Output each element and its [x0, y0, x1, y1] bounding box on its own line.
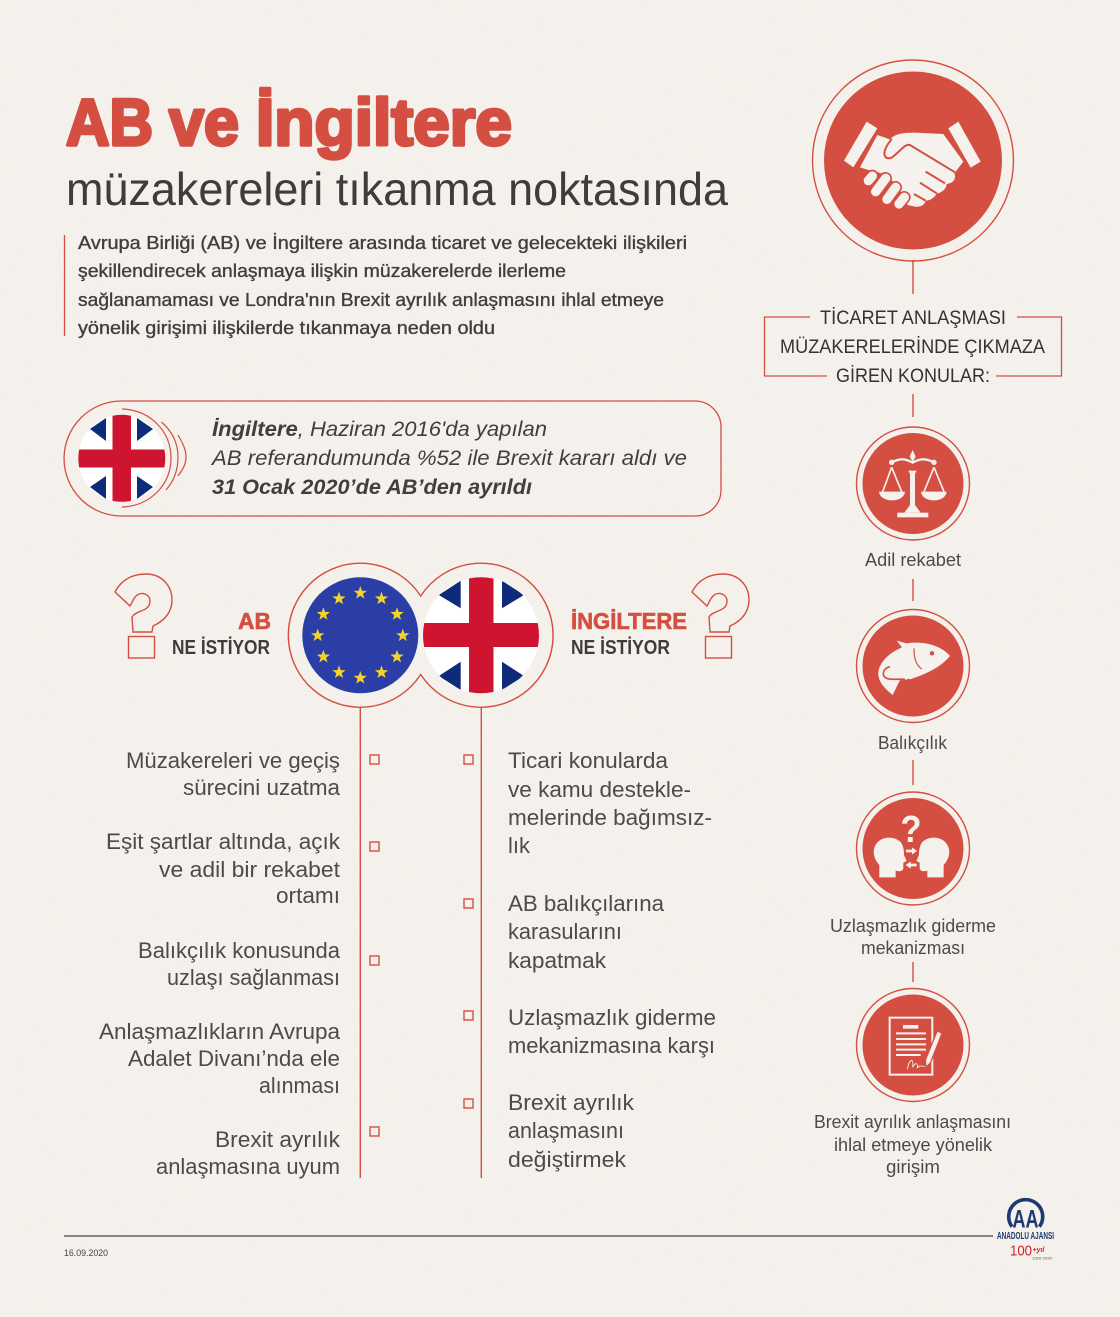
list: AB demands: Anlaşmazlıkların Avrupa: [99, 1019, 341, 1044]
heading: AB ne istiyor: NE İSTİYOR: [172, 636, 270, 659]
panel: topics heading: MÜZAKERELERİNDE ÇIKMAZA: [780, 335, 1045, 358]
list: İngiltere demands: karasularını: [508, 919, 622, 944]
label: Uzlaşmazlık giderme mekanizması: [830, 916, 996, 958]
list: AB demands: Eşit şartlar altında, açık: [106, 829, 341, 854]
connector: [912, 962, 914, 982]
list: AB demands: [99, 748, 379, 1179]
list: İngiltere demands: melerinde bağımsız-: [508, 805, 712, 830]
icon: UK flag large: [420, 575, 542, 697]
list: İngiltere demands: [464, 748, 716, 1172]
title: İngiltere: [256, 85, 512, 159]
callout text: [210, 418, 687, 499]
connector: [912, 760, 914, 785]
intro paragraph: Avrupa Birliği (AB) ve İngiltere arasında ticaret ve gelecekteki ilişkileri: [78, 233, 687, 253]
title: ve: [169, 85, 239, 159]
intro paragraph: sağlanamaması ve Londra'nın Brexit ayrılık anlaşmasını ihlal etmeye: [78, 290, 664, 310]
icon: dispute heads: ?: [900, 809, 922, 851]
connector: [912, 394, 914, 417]
logo: Anadolu Ajansı: ANADOLU AJANSI: [997, 1231, 1054, 1242]
list: AB demands: uzlaşı sağlanması: [167, 965, 340, 990]
label: Brexit ayrılık anlaşmasını ihlal etmeye yönelik girişim: girişim: [886, 1157, 940, 1177]
logo: Anadolu Ajansı: 1920-2020: [1032, 1256, 1053, 1260]
heading: İngiltere ne istiyor: NE İSTİYOR: [571, 636, 670, 659]
callout text: AB referandumunda %52 ile Brexit kararı aldı ve: [210, 447, 687, 470]
icon: handshake: [812, 60, 1014, 261]
connector: [912, 579, 914, 601]
list: AB demands: Müzakereleri ve geçiş: [126, 748, 340, 773]
logo: Anadolu Ajansı: 100: [1010, 1242, 1032, 1260]
logo: Anadolu Ajansı: [997, 1200, 1054, 1260]
label: Uzlaşmazlık giderme mekanizması: mekanizması: [861, 938, 965, 958]
title: [66, 85, 512, 159]
list: İngiltere demands: Uzlaşmazlık giderme: [508, 1005, 716, 1030]
footer rule: [64, 1235, 993, 1237]
subtitle: müzakereleri tıkanma noktasında: [66, 163, 728, 215]
intro paragraph: [64, 233, 687, 338]
list: İngiltere demands: ve kamu destekle-: [508, 777, 691, 802]
intro paragraph: şekillendirecek anlaşmaya ilişkin müzakerelerde ilerleme: [78, 261, 566, 281]
icon: scales: [856, 427, 970, 540]
list: İngiltere demands: anlaşmasını: [508, 1118, 624, 1143]
panel: Brexit callout: [64, 401, 721, 516]
icon: EU flag: [302, 577, 418, 693]
icon: UK flag small: [76, 412, 168, 504]
list: AB demands: ortamı: [276, 883, 340, 908]
list: AB demands: alınması: [259, 1073, 340, 1098]
timeline stem: İngiltere: [480, 707, 482, 1178]
heading: İngiltere ne istiyor: [571, 608, 687, 659]
list: İngiltere demands: değiştirmek: [508, 1147, 627, 1172]
list: İngiltere demands: kapatmak: [508, 948, 607, 973]
icon: fish: [856, 610, 970, 722]
bullets: [370, 755, 379, 1136]
panel: topics heading: TİCARET ANLAŞMASI: [820, 306, 1006, 329]
heading: İngiltere ne istiyor: İNGİLTERE: [571, 608, 687, 634]
label: Brexit ayrılık anlaşmasını ihlal etmeye yönelik girişim: Brexit ayrılık anlaşmasını: [814, 1112, 1011, 1132]
callout text: İngiltere, Haziran 2016'da yapılan: [212, 418, 547, 441]
list: AB demands: Adalet Divanı’nda ele: [128, 1046, 340, 1071]
icon: linked ring around flags: [288, 563, 553, 707]
list: AB demands: Balıkçılık konusunda: [138, 938, 341, 963]
heading: AB ne istiyor: [172, 608, 271, 659]
icon: dispute heads: [856, 792, 970, 905]
list: AB demands: Brexit ayrılık: [215, 1127, 341, 1152]
icon: question mark left: [115, 574, 172, 658]
date: 16.09.2020: [64, 1248, 108, 1259]
label: Uzlaşmazlık giderme mekanizması: Uzlaşmazlık giderme: [830, 916, 996, 936]
list: AB demands: sürecini uzatma: [183, 775, 341, 800]
heading: AB ne istiyor: AB: [238, 608, 271, 634]
logo: Anadolu Ajansı: +yıl: [1032, 1247, 1045, 1254]
panel: topics heading: GİREN KONULAR:: [836, 364, 990, 387]
label: Balıkçılık: Balıkçılık: [878, 733, 948, 753]
list: AB demands: ve adil bir rekabet: [159, 857, 340, 882]
list: İngiltere demands: Brexit ayrılık: [508, 1090, 635, 1115]
panel: topics heading: [764, 306, 1062, 387]
callout text: 31 Ocak 2020’de AB’den ayrıldı: [212, 476, 532, 499]
label: Adil rekabet: Adil rekabet: [865, 550, 961, 570]
list: İngiltere demands: lık: [508, 833, 531, 858]
bullets: [464, 755, 473, 1108]
icon: question mark right: [692, 574, 749, 658]
intro paragraph: yönelik girişimi ilişkilerde tıkanmaya neden oldu: [78, 318, 495, 338]
label: Brexit ayrılık anlaşmasını ihlal etmeye yönelik girişim: ihlal etmeye yönelik: [834, 1135, 993, 1155]
list: İngiltere demands: mekanizmasına karşı: [508, 1033, 715, 1058]
timeline stem: AB: [359, 707, 361, 1178]
title: AB: [66, 85, 153, 159]
label: Brexit ayrılık anlaşmasını ihlal etmeye yönelik girişim: [814, 1112, 1011, 1177]
list: İngiltere demands: Ticari konularda: [508, 748, 669, 773]
list: İngiltere demands: AB balıkçılarına: [508, 891, 665, 916]
connector: [912, 260, 914, 294]
list: AB demands: anlaşmasına uyum: [156, 1154, 340, 1179]
icon: signed document: [856, 988, 970, 1102]
logo: Anadolu Ajansı: AA: [1012, 1206, 1038, 1234]
